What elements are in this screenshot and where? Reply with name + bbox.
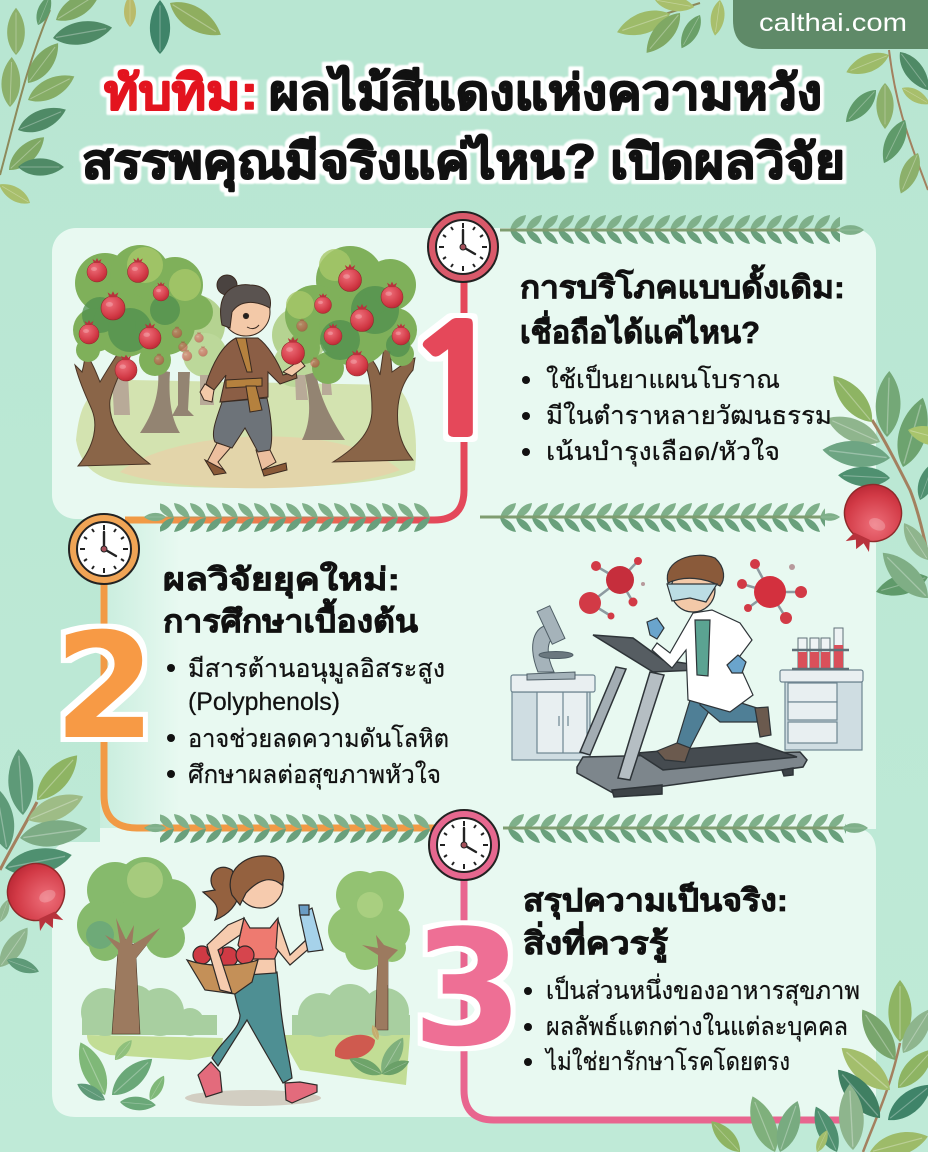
right tree	[328, 871, 410, 1030]
garland: between panels 1 and 2, right	[480, 501, 840, 535]
text block: step 2: มีสารต้านอนุมูลอิสระสูง	[188, 655, 445, 684]
woman	[187, 856, 323, 1103]
garland: between panels 1 and 2, left	[144, 501, 430, 535]
microscope	[527, 606, 575, 680]
foliage and pomegranate: left middle	[0, 748, 89, 978]
text block: step 1: การบริโภคแบบดั้งเดิม:	[520, 264, 845, 305]
foliage: bottom center sprig	[706, 1092, 845, 1152]
foliage: right upper branch	[840, 47, 928, 197]
panel: step 2	[100, 519, 876, 829]
garland: between panels 2 and 3, right	[503, 812, 868, 846]
fallen fruit plant	[335, 1024, 412, 1080]
left tree	[73, 245, 213, 466]
text block: step 2: (Polyphenols)	[188, 688, 340, 716]
illustration: orchard with person	[73, 245, 417, 488]
text block: step 2: ศึกษาผลต่อสุขภาพหัวใจ	[188, 760, 441, 790]
text block: step 1: มีในตำราหลายวัฒนธรรม	[546, 401, 832, 430]
bushes	[81, 984, 410, 1037]
text block: step 2	[163, 561, 449, 790]
text block: step 3: ไม่ใช่ยารักษาโรคโดยตรง	[544, 1047, 790, 1076]
molecules	[590, 561, 801, 618]
foliage: top left branch	[0, 0, 114, 209]
scientist	[647, 555, 771, 762]
timeline: orange connector	[104, 570, 440, 828]
panel: step 1	[52, 228, 876, 519]
clock 2	[69, 514, 139, 584]
shadow	[185, 1090, 321, 1106]
foliage: bottom right branch	[829, 980, 928, 1152]
clock 3	[429, 810, 499, 880]
corner tag: site name: calthai.com	[759, 9, 907, 37]
text block: step 3: สรุปความเป็นจริง:	[523, 881, 788, 920]
right cabinet	[780, 670, 863, 750]
title	[82, 64, 845, 192]
orchard ground	[76, 380, 416, 488]
number 3: 3	[412, 895, 523, 1082]
illustration: woman walking with basket	[71, 856, 412, 1112]
text block: step 3: สิ่งที่ควรรู้	[523, 921, 668, 963]
clock 1	[428, 212, 498, 282]
foliage and pomegranate: right middle	[821, 369, 928, 606]
text block: step 1: เน้นบำรุงเลือด/หัวใจ	[546, 437, 780, 467]
person	[200, 275, 305, 476]
foliage: top right sprig	[614, 0, 727, 59]
text block: step 2: อาจช่วยลดความดันโลหิต	[188, 724, 449, 753]
panel: step 3	[52, 828, 876, 1117]
right tree	[285, 246, 417, 462]
left cabinet	[511, 675, 595, 760]
timeline: red connector	[125, 270, 464, 520]
treadmill	[577, 635, 807, 797]
illustration: scientist on treadmill	[511, 555, 863, 797]
text block: step 1: ใช้เป็นยาแผนโบราณ	[546, 364, 780, 394]
garland: between panels 2 and 3, left	[144, 812, 430, 846]
timeline: pink connector	[464, 870, 843, 1120]
text block: step 2: ผลวิจัยยุคใหม่:	[163, 561, 400, 599]
left plant	[71, 1037, 169, 1112]
text block: step 1	[520, 264, 845, 467]
title: ทับทิม:	[104, 67, 258, 120]
title: สรรพคุณมีจริงแค่ไหน? เปิดผลวิจัย	[82, 133, 845, 192]
fruits	[79, 257, 410, 381]
left tree	[77, 857, 196, 1034]
text block: step 3: ผลลัพธ์แตกต่างในแต่ละบุคคล	[546, 1012, 848, 1042]
text block: step 3	[523, 881, 860, 1076]
text block: step 2: การศึกษาเบื้องต้น	[163, 598, 418, 639]
foliage: top center sprig	[124, 0, 227, 54]
text block: step 3: เป็นส่วนหนึ่งของอาหารสุขภาพ	[546, 973, 860, 1006]
garland: top right	[500, 213, 864, 247]
grass	[87, 1035, 410, 1085]
background trees	[112, 295, 345, 440]
test tubes	[792, 628, 849, 669]
text block: step 1: เชื่อถือได้แค่ไหน?	[520, 310, 760, 350]
number 2: 2	[54, 602, 156, 772]
corner tag: site name	[733, 0, 928, 49]
number 1: 1	[403, 309, 510, 457]
title: ผลไม้สีแดงแห่งความหวัง	[269, 64, 822, 120]
